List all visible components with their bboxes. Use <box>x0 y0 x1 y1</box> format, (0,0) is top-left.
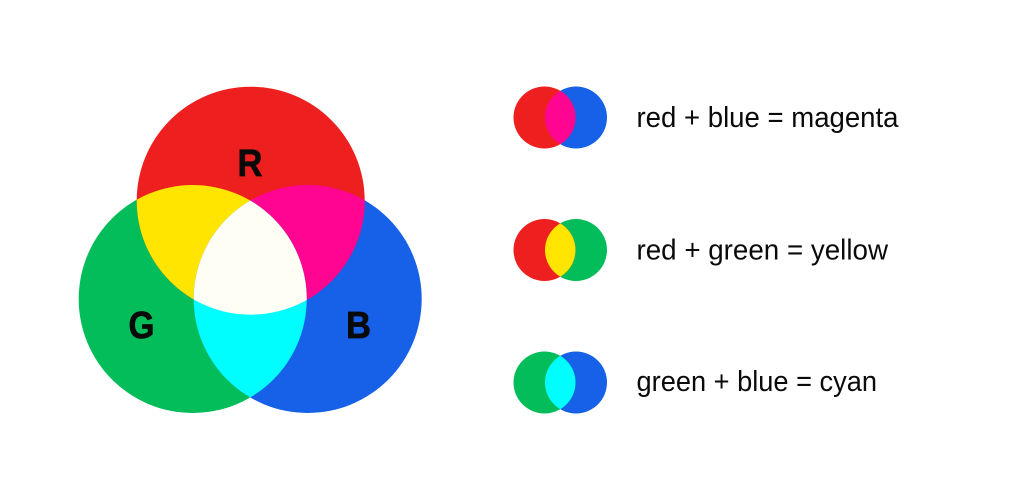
overlap: yellow <box>136 185 250 300</box>
row: red + green = yellow <box>514 219 888 281</box>
circle: green <box>79 185 307 413</box>
text: red + blue = magenta: red + blue = magenta <box>636 102 899 134</box>
text: green + blue = cyan: green + blue = cyan <box>636 366 877 398</box>
icon: red and blue circles <box>514 86 607 148</box>
RGB venn diagram <box>79 87 422 413</box>
label: B: B <box>346 305 371 347</box>
circle: red <box>137 87 365 315</box>
label: R: R <box>238 143 262 185</box>
overlap: white center <box>194 200 307 315</box>
circle: blue <box>194 185 422 413</box>
text: red + green = yellow: red + green = yellow <box>636 234 888 266</box>
icon: green and blue circles <box>514 352 607 414</box>
icon: red and green circles <box>514 219 607 281</box>
row: green + blue = cyan <box>514 352 877 414</box>
label: G: G <box>128 305 154 347</box>
overlap: cyan <box>194 200 307 398</box>
row: red + blue = magenta <box>514 86 899 148</box>
overlap: magenta <box>194 185 365 300</box>
